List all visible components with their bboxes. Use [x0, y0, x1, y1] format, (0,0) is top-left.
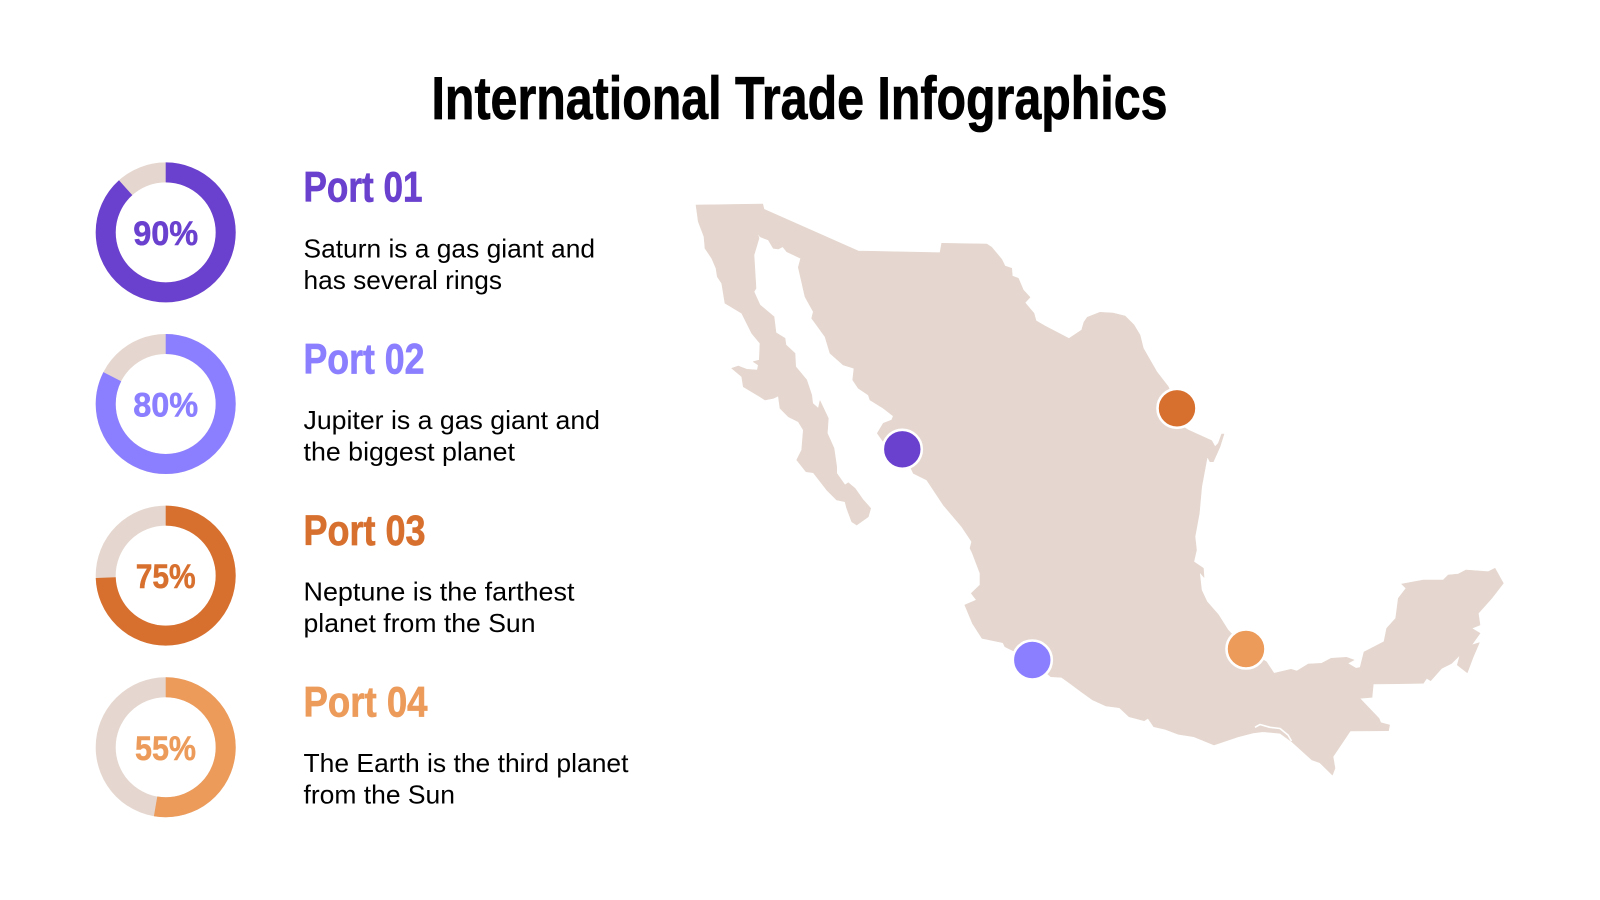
heading: port 01: Port 01	[304, 164, 422, 212]
marker: port 02	[1013, 640, 1052, 680]
marker: port 01	[883, 430, 922, 469]
marker: port 03	[1158, 389, 1196, 428]
text: port 04 description: from the Sun	[304, 780, 455, 810]
text: port 03 description: Neptune is the farthest	[304, 576, 575, 606]
donut chart: 90%: 90%	[133, 215, 198, 253]
title: International Trade Infographics	[432, 65, 1168, 132]
heading: port 02: Port 02	[304, 335, 424, 383]
heading: port 04: Port 04	[304, 678, 428, 726]
panel: port 04	[106, 678, 629, 810]
text: port 02 description	[304, 405, 600, 466]
donut chart: 55%	[106, 687, 226, 807]
donut chart: 80%	[106, 344, 226, 464]
text: port 03 description	[304, 576, 575, 638]
text: port 01 description: Saturn is a gas giant and	[304, 233, 595, 263]
text: port 04 description	[304, 748, 629, 810]
text: port 02 description: Jupiter is a gas giant and	[304, 405, 600, 435]
panel: port 03	[106, 507, 575, 638]
text: port 02 description: the biggest planet	[304, 436, 516, 466]
map: Mexico	[696, 204, 1503, 775]
text: port 04 description: The Earth is the third planet	[304, 748, 629, 778]
panel: port 01	[106, 164, 595, 295]
donut chart: 80%: 80%	[133, 387, 198, 425]
text: port 03 description: planet from the Sun	[304, 608, 536, 638]
text: port 01 description: has several rings	[304, 265, 502, 295]
text: port 01 description	[304, 233, 595, 295]
donut chart: 90%	[106, 172, 226, 292]
donut chart: 55%: 55%	[135, 730, 196, 768]
donut chart: 75%	[106, 516, 226, 636]
map shape	[696, 204, 1503, 775]
panel: port 02	[106, 335, 600, 466]
marker: port 04	[1226, 630, 1266, 668]
donut chart: 75%: 75%	[136, 558, 196, 596]
lagoon	[1255, 724, 1292, 741]
heading: port 03: Port 03	[304, 507, 426, 555]
